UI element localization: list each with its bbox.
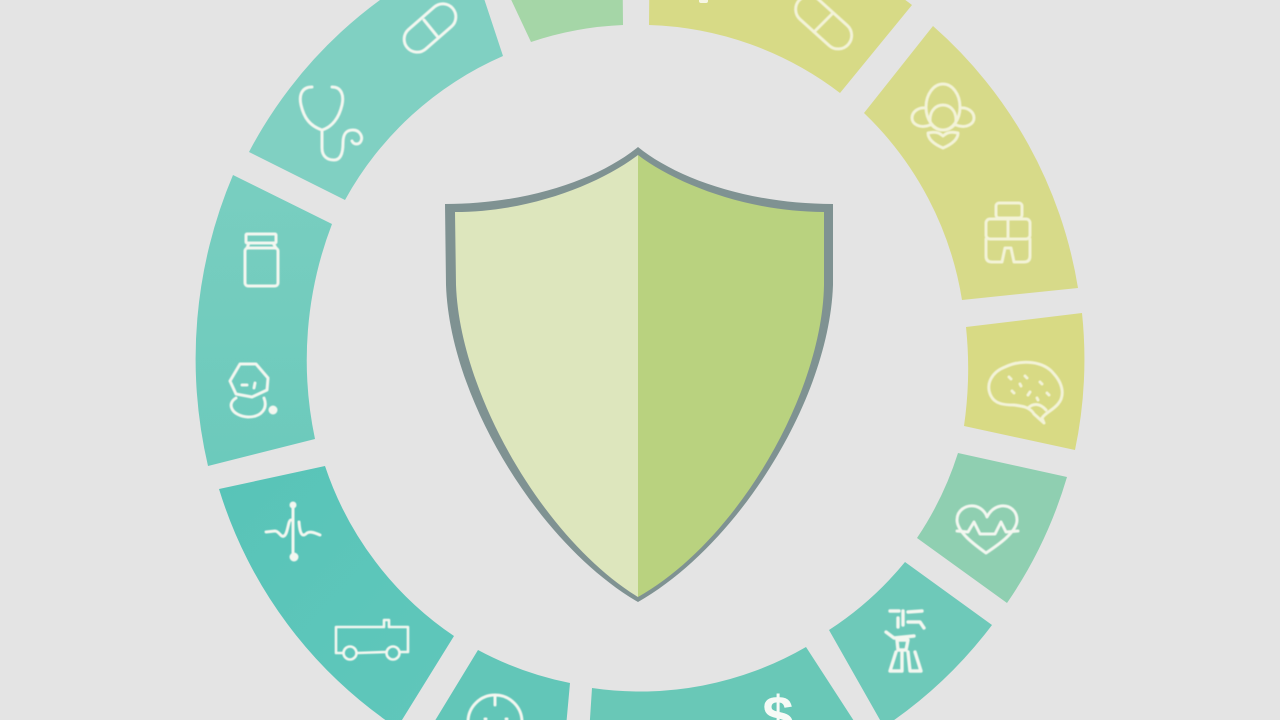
icon: round socket [468,695,522,720]
icon: small mark at top [699,0,708,3]
icon: brain [989,362,1062,423]
segment: teal with stethoscope and pill [249,0,503,200]
icon: head with ears and heart [912,84,974,148]
segment: light green top [484,0,623,42]
icon: ECG pulse [266,503,320,560]
icon: bottle pack [986,203,1030,262]
shield: right half [638,155,824,597]
icon: heart with pulse [957,506,1018,553]
icon: jar [245,234,278,286]
shield [445,147,833,602]
segment: yellow with brain [964,313,1084,450]
segment: teal with jar and baby [196,175,332,466]
icon: capsule [399,0,461,57]
segment: teal bottom with socket [422,650,570,720]
segment: yellow with head and bottle [864,26,1078,300]
icon: yellow capsule [790,0,857,54]
icon: stethoscope [300,87,362,160]
icon: baby [230,364,276,417]
icon: tool stand [886,611,924,671]
segment: green with heart [917,453,1067,603]
segment: teal with ECG and ambulance [219,466,454,720]
shield: left half [455,155,638,597]
segment: teal with staff icon [829,562,992,720]
shield: outline [445,147,833,602]
segment: teal bottom with dollar [585,647,865,720]
icon: ambulance [336,620,408,660]
segment: top yellow with pill [649,0,912,93]
